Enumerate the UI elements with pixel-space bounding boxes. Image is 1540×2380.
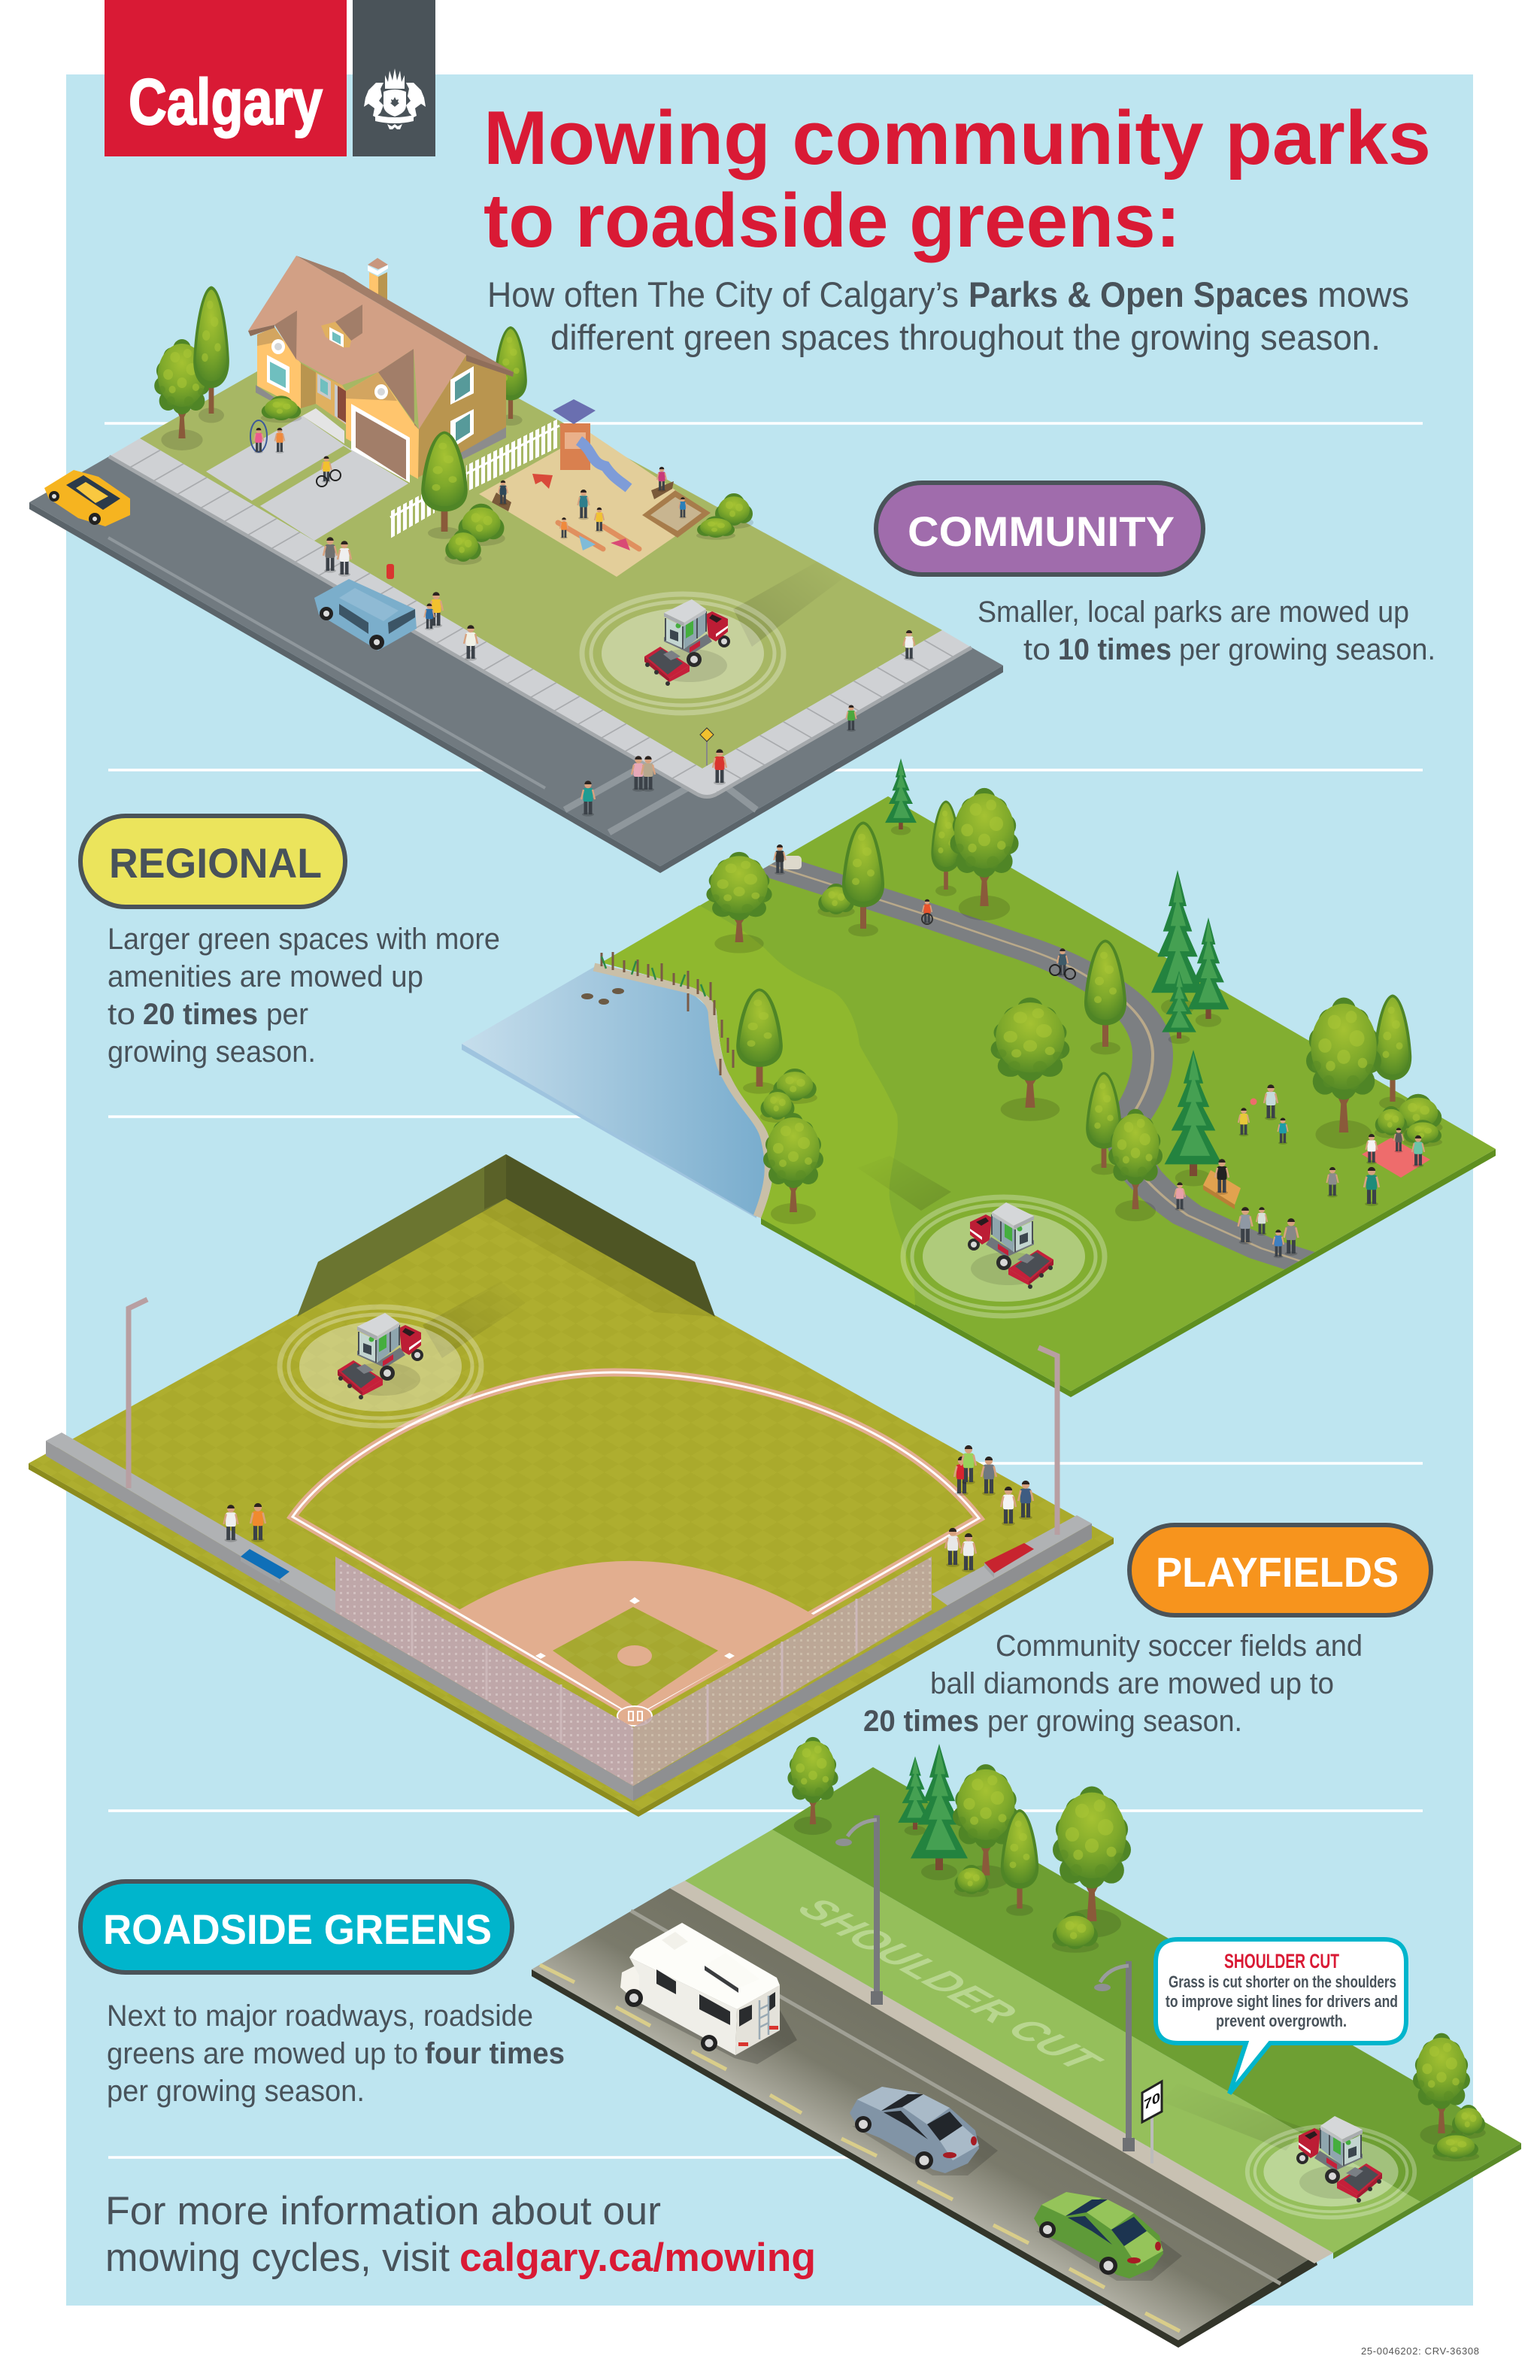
mower in regional park — [903, 1197, 1105, 1316]
road — [29, 456, 1003, 873]
subtitle: different green spaces throughout the growing season. — [550, 317, 1381, 357]
community description: 10 times — [1058, 633, 1172, 666]
scene: community park isometric block — [29, 256, 1003, 873]
callout: shoulder cut: SHOULDER CUT — [1224, 1950, 1339, 1972]
mower on the shoulder — [1162, 2083, 1414, 2218]
SHOULDER CUT text on grass: SHOULDER CUT — [787, 1892, 1112, 2078]
playfields description: Community soccer fields and — [996, 1630, 1363, 1663]
house — [248, 256, 514, 483]
speed limit sign — [1142, 2081, 1162, 2163]
sidewalk — [109, 438, 972, 797]
subtitle: Parks & Open Spaces — [969, 274, 1308, 314]
COMMUNITY label pill: COMMUNITY — [908, 508, 1175, 555]
dark rough grass — [772, 1767, 1521, 2202]
benches — [241, 1543, 1034, 1584]
document code: 25-0046202: CRV-36308 — [1361, 2345, 1479, 2357]
speed limit sign: 70 — [1144, 2090, 1160, 2114]
roadside description: four times — [425, 2037, 565, 2070]
infield arc and foul lines — [293, 1372, 979, 1716]
playfields description: ball diamonds are mowed up to — [930, 1667, 1334, 1700]
regional description: amenities are mowed up — [108, 960, 423, 993]
shoulder cut grass — [685, 1830, 1420, 2253]
community description: Smaller, local parks are mowed up — [978, 596, 1409, 629]
footer call to action: mowing cycles, visit — [105, 2236, 450, 2280]
roadside description: Next to major roadways, roadside — [107, 2000, 533, 2033]
title: Mowing community parks — [484, 96, 1431, 180]
mower in community park — [582, 560, 842, 713]
REGIONAL label pill — [80, 816, 345, 907]
roadside description: per growing season. — [107, 2075, 365, 2108]
REGIONAL label pill: REGIONAL — [109, 839, 322, 887]
path — [763, 863, 1346, 1275]
roadside trees and bushes — [787, 1737, 1486, 2161]
COMMUNITY label pill — [876, 483, 1203, 575]
subtitle: How often The City of Calgary’s — [487, 274, 959, 314]
blue SUV — [314, 579, 417, 650]
diamond — [535, 1597, 735, 1726]
roadside description: greens are mowed up to — [107, 2037, 418, 2070]
light poles — [129, 1299, 1057, 1535]
grass — [602, 796, 1496, 1397]
regional description: growing season. — [108, 1035, 316, 1069]
perimeter wall — [46, 1433, 1092, 1801]
outfield backstop wall — [297, 1154, 715, 1317]
icon: Calgary crest — [364, 68, 426, 129]
ROADSIDE GREENS label pill: ROADSIDE GREENS — [103, 1906, 492, 1953]
playground: tower, slide, seesaws and sandbox — [492, 399, 711, 550]
dirt infield — [459, 1561, 814, 1716]
sidewalk — [670, 1881, 1333, 2263]
scene: regional park isometric block — [462, 758, 1496, 1397]
chain link fence — [335, 1557, 932, 1786]
callout: shoulder cut: Grass is cut shorter on the shoulders — [1169, 1972, 1396, 1991]
picnic blanket — [1362, 1138, 1430, 1178]
footer call to action: For more information about our — [105, 2189, 661, 2233]
playfields description: 20 times — [863, 1705, 979, 1738]
title: to roadside greens: — [484, 179, 1181, 263]
trees in the regional park — [706, 758, 1442, 1224]
field base — [29, 1199, 1114, 1817]
mower on playfield — [280, 1281, 526, 1426]
green SUV — [1034, 2192, 1182, 2281]
people at the playfield — [224, 1445, 1033, 1572]
motorhome — [620, 1923, 797, 2064]
City of Calgary logo: Calgary — [129, 66, 323, 138]
road — [532, 1888, 1317, 2348]
picket fence — [390, 418, 559, 538]
yellow car — [44, 470, 130, 526]
street lamps — [835, 1815, 1135, 2151]
lawn — [140, 312, 942, 769]
grey sedan — [850, 2087, 998, 2175]
regional description: to — [108, 998, 135, 1031]
people in the regional park — [774, 844, 1424, 1258]
scene: roadside green isometric block — [532, 1737, 1521, 2348]
sand playground area — [479, 432, 709, 577]
PLAYFIELDS label pill — [1129, 1525, 1431, 1615]
pond — [462, 967, 769, 1218]
playfields description: per growing season. — [987, 1705, 1242, 1738]
callout: shoulder cut: prevent overgrowth. — [1216, 2012, 1347, 2030]
ROADSIDE GREENS label pill — [80, 1881, 512, 1972]
reeds and ducks — [581, 952, 733, 1075]
community description: per growing season. — [1179, 633, 1435, 666]
footer call to action: calgary.ca/mowing — [459, 2236, 816, 2280]
front tree and bushes — [261, 396, 753, 565]
subtitle: mows — [1317, 274, 1409, 314]
regional description: Larger green spaces with more — [108, 923, 500, 956]
callout: shoulder cut — [1156, 1939, 1406, 2093]
callout: shoulder cut: to improve sight lines for drivers and — [1166, 1992, 1398, 2011]
PLAYFIELDS label pill: PLAYFIELDS — [1156, 1548, 1399, 1596]
community description: to — [1023, 633, 1050, 666]
scene: playfield isometric block — [29, 1154, 1114, 1817]
mowing trail — [857, 1156, 951, 1211]
regional description: 20 times — [143, 998, 258, 1031]
City of Calgary logo — [105, 0, 435, 156]
tree group behind house — [154, 286, 527, 450]
people on the community block — [250, 420, 915, 817]
park bench — [1203, 1170, 1241, 1209]
driveway — [206, 416, 408, 541]
regional description: per — [266, 998, 308, 1031]
